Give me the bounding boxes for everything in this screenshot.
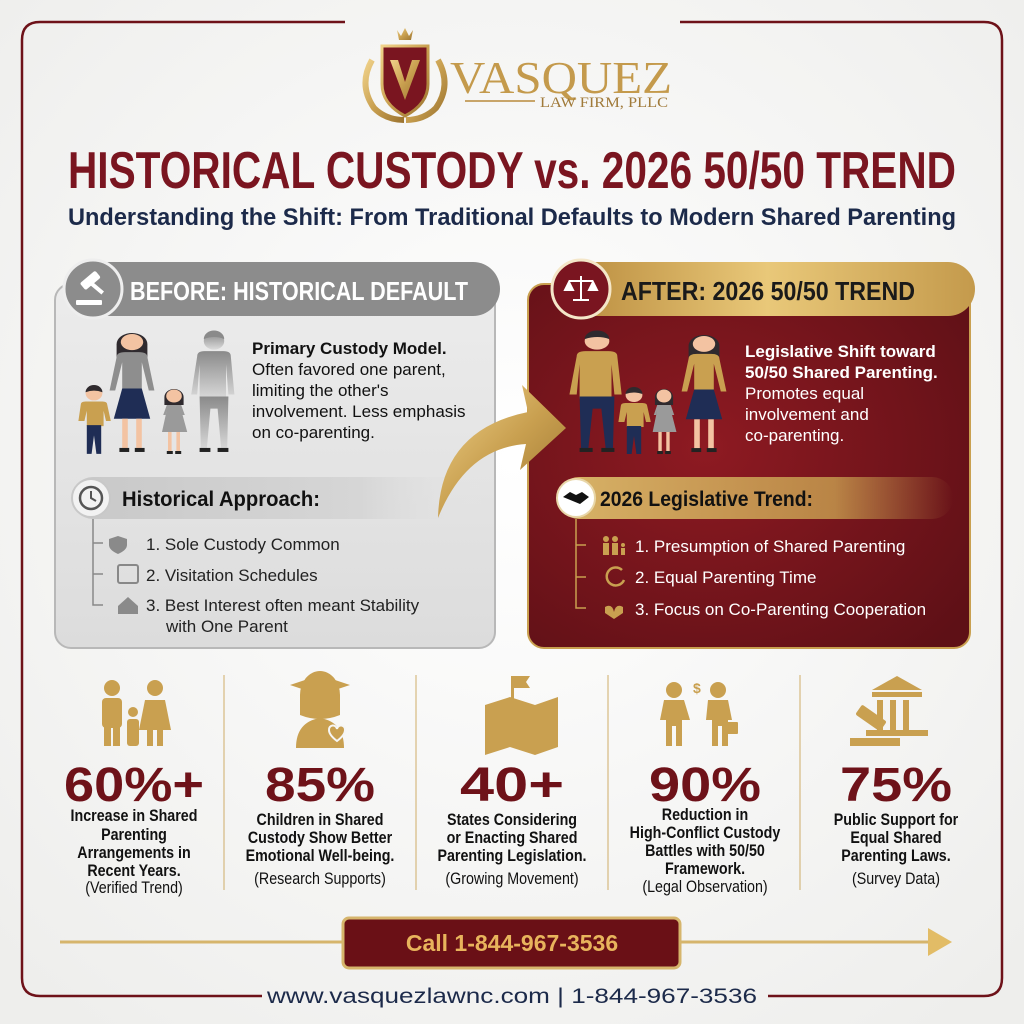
- stat 3: or Enacting Shared: [447, 829, 577, 847]
- text: legislative shift: Promotes equal: [745, 384, 864, 403]
- text: primary custody model: Primary Custody Model.: [252, 339, 447, 358]
- text: primary custody model: on co-parenting.: [252, 423, 375, 442]
- stat 1: 60%+: [64, 759, 204, 812]
- stat 3: Parenting Legislation.: [437, 847, 587, 865]
- historical list: 1. Sole Custody Common: [146, 535, 340, 554]
- stat 4: $: [693, 680, 701, 696]
- stat 2: [246, 671, 394, 888]
- footer: www.vasquezlawnc.com | 1-844-967-3536: [266, 985, 757, 1008]
- historical list: 2. Visitation Schedules: [146, 566, 318, 585]
- logo wordmark: VASQUEZ: [450, 52, 672, 103]
- logo: LAW FIRM, PLLC: [540, 95, 668, 111]
- stat 4: [630, 680, 781, 896]
- stat 3: [437, 676, 587, 888]
- stat 5: 75%: [840, 759, 952, 812]
- call to action: Call 1-844-967-3536: [406, 930, 618, 956]
- stat 1: [64, 680, 204, 897]
- illustration: shared parenting family: [569, 331, 726, 454]
- legislative trend bar: 2026 Legislative Trend:: [600, 488, 813, 511]
- historical list: with One Parent: [165, 617, 288, 636]
- stat 2: Children in Shared: [257, 811, 383, 829]
- stat 4: High-Conflict Custody: [630, 824, 781, 842]
- stat 4: Battles with 50/50: [645, 842, 765, 860]
- after header: [552, 260, 975, 318]
- legislative trend bar: [557, 477, 953, 519]
- stat 1: Parenting: [101, 826, 167, 844]
- stat 4: 90%: [649, 759, 761, 812]
- stat 1: Increase in Shared: [71, 807, 197, 825]
- stat 4: (Legal Observation): [642, 878, 768, 896]
- stat 3: 40+: [460, 759, 564, 812]
- stat 4: Reduction in: [662, 806, 748, 824]
- stats row: [64, 671, 958, 897]
- stat 1: Recent Years.: [87, 862, 181, 880]
- logo: [365, 28, 672, 120]
- historical approach bar: Historical Approach:: [122, 488, 320, 511]
- text: primary custody model: Often favored one parent,: [252, 360, 446, 379]
- historical list: [93, 519, 420, 636]
- stat 3: States Considering: [447, 811, 577, 829]
- trend list: 3. Focus on Co-Parenting Cooperation: [635, 600, 926, 619]
- historical approach bar: [72, 477, 484, 519]
- text: legislative shift: involvement and: [745, 405, 869, 424]
- trend list: 1. Presumption of Shared Parenting: [635, 537, 905, 556]
- historical list: 3. Best Interest often meant Stability: [146, 596, 420, 615]
- text: primary custody model: involvement. Less emphasis: [252, 402, 466, 421]
- text: legislative shift: 50/50 Shared Parenting.: [745, 363, 938, 382]
- stat 2: (Research Supports): [254, 870, 386, 888]
- trend list: 2. Equal Parenting Time: [635, 568, 816, 587]
- before header: [64, 260, 500, 318]
- stat 2: Emotional Well-being.: [246, 847, 394, 865]
- stat 5: (Survey Data): [852, 870, 940, 888]
- stat 3: (Growing Movement): [445, 870, 579, 888]
- stat 4: Framework.: [665, 860, 745, 878]
- stat 5: Equal Shared: [850, 829, 942, 847]
- stat 5: Public Support for: [834, 811, 958, 829]
- stat 1: (Verified Trend): [85, 879, 183, 897]
- stat 5: [834, 676, 958, 888]
- text: primary custody model: limiting the other's: [252, 381, 388, 400]
- logo emblem: [365, 28, 445, 120]
- trend list: [576, 519, 926, 619]
- text: legislative shift: co-parenting.: [745, 426, 844, 445]
- before header: BEFORE: HISTORICAL DEFAULT: [130, 276, 468, 306]
- arrow: transition: [438, 385, 566, 518]
- stat 1: Arrangements in: [77, 844, 191, 862]
- subtitle: Understanding the Shift: From Traditional Defaults to Modern Shared Parenting: [68, 204, 956, 231]
- call to action: [60, 918, 952, 968]
- stat 5: Parenting Laws.: [841, 847, 951, 865]
- text: legislative shift: Legislative Shift toward: [745, 342, 936, 361]
- panel: before historical default: [55, 260, 500, 648]
- illustration: single-parent family: [78, 331, 234, 454]
- after header: AFTER: 2026 50/50 TREND: [621, 276, 915, 306]
- stat 2: 85%: [265, 759, 375, 812]
- panel: after 2026 trend: [528, 260, 975, 648]
- stat 2: Custody Show Better: [248, 829, 392, 847]
